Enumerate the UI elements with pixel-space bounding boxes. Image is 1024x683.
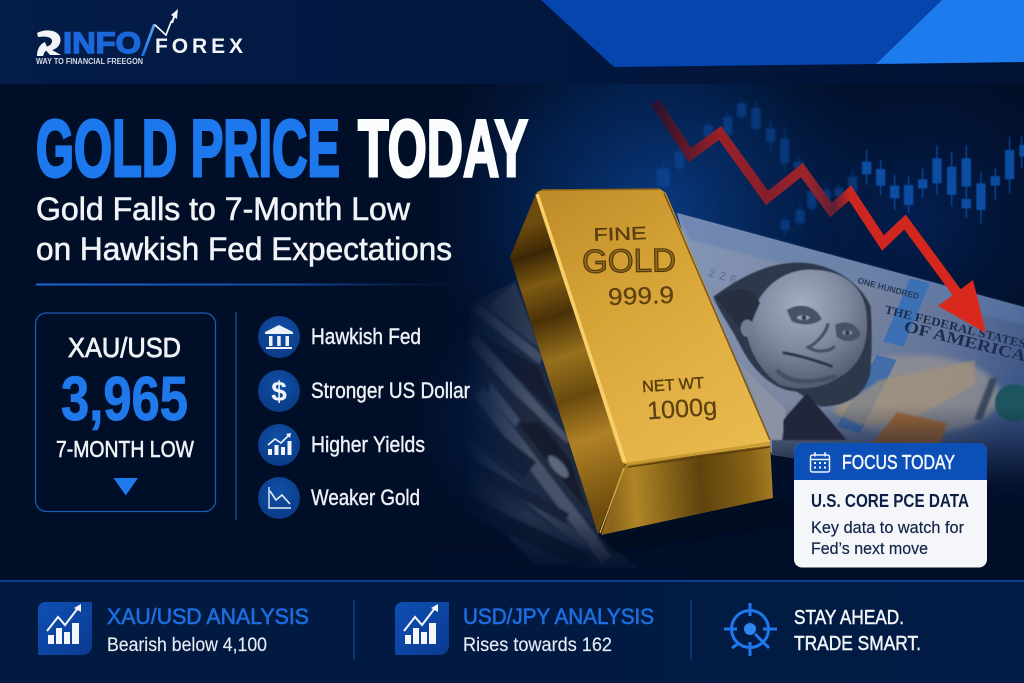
gold bar xyxy=(510,189,790,552)
price note: 7-MONTH LOW xyxy=(56,436,195,462)
bar engraving: 999.9: 999.9 xyxy=(608,282,674,311)
footer: stay ahead xyxy=(724,603,921,656)
panel: XAU/USD price xyxy=(36,313,216,512)
driver: Hawkish Fed xyxy=(258,316,421,358)
driver: Weaker Gold xyxy=(258,477,420,519)
bill lettering: THE FEDERAL STATES xyxy=(883,302,1024,351)
text: Bearish below 4,100 xyxy=(107,635,267,656)
Franklin portrait xyxy=(713,263,872,440)
bill top edge tint xyxy=(677,213,1024,325)
bill green seal xyxy=(995,384,1024,422)
driver: Higher Yields xyxy=(258,424,425,466)
brow and eye shadows xyxy=(787,306,822,325)
icon: chart box xyxy=(395,602,449,655)
callout text: Key data to watch for xyxy=(811,518,964,537)
icon: chart box xyxy=(38,602,92,655)
driver: Stronger US Dollar xyxy=(258,370,470,412)
candlestick chart xyxy=(657,98,1024,237)
bill lettering: ONE HUNDRED xyxy=(856,275,920,301)
callout text xyxy=(811,518,964,558)
logo tagline: WAY TO FINANCIAL FREEGON xyxy=(36,57,143,66)
footer: XAU/USD analysis xyxy=(38,602,309,656)
panel label: XAU/USD xyxy=(68,332,181,363)
down triangle xyxy=(114,478,138,496)
bar bottom face xyxy=(601,443,773,535)
drivers list xyxy=(258,316,470,519)
slogan: STAY AHEAD. xyxy=(794,607,904,629)
bar left face xyxy=(510,191,625,534)
bill lettering xyxy=(856,275,1024,365)
bar engraving: FINE: FINE xyxy=(593,223,647,245)
coat xyxy=(783,393,847,440)
price value: 3,965 xyxy=(61,365,188,434)
logo slash xyxy=(141,24,156,56)
callout text: Fed’s next move xyxy=(811,539,928,558)
driver: Higher Yields: Higher Yields xyxy=(311,432,425,457)
bar edge highlights xyxy=(537,189,770,533)
bar shadow xyxy=(600,500,790,552)
driver: Stronger US Dollar: $ xyxy=(271,376,287,407)
callout heading: FOCUS TODAY xyxy=(842,452,955,474)
slogan: TRADE SMART. xyxy=(794,633,921,655)
driver: Hawkish Fed: Hawkish Fed xyxy=(311,324,421,349)
bar engraving: GOLD: GOLD xyxy=(582,241,676,280)
footer: USD/JPY analysis xyxy=(395,602,654,656)
text: Rises towards 162 xyxy=(463,635,612,656)
bar engraving: 1000g: 1000g xyxy=(646,393,718,425)
title: GOLD PRICE: GOLD PRICE xyxy=(36,104,340,194)
title xyxy=(36,104,528,194)
bar front face xyxy=(537,189,770,465)
logo rising arrow xyxy=(155,9,178,35)
collar xyxy=(740,363,787,440)
icon: calendar xyxy=(810,452,830,472)
bill serial marks: 226 xyxy=(707,267,737,286)
nose xyxy=(808,323,835,351)
hair xyxy=(713,263,872,407)
subtitle line 1: Gold Falls to 7-Month Low xyxy=(36,191,411,227)
subtitle line 2: on Hawkish Fed Expectations xyxy=(36,231,452,267)
dollar bill with portrait xyxy=(677,213,1024,500)
footer bar xyxy=(0,580,1024,683)
icon: target xyxy=(724,603,777,656)
callout: focus today xyxy=(794,443,987,568)
slogan xyxy=(794,607,921,655)
red falling arrow xyxy=(655,102,986,333)
heading: USD/JPY ANALYSIS xyxy=(463,604,654,629)
bottom fade of bill xyxy=(772,405,1024,500)
callout subject: U.S. CORE PCE DATA xyxy=(811,491,969,511)
bar engraving: NET WT: NET WT xyxy=(642,375,705,396)
bill lettering: OF AMERICA xyxy=(902,318,1024,365)
dollar bills behind gold bar, left xyxy=(471,281,631,566)
driver: Stronger US Dollar: Stronger US Dollar xyxy=(311,378,470,403)
title: TODAY: TODAY xyxy=(358,104,528,194)
logo xyxy=(36,9,243,66)
callout header xyxy=(794,443,987,480)
logo wordmark FOREX: FOREX xyxy=(155,35,243,58)
header blue shapes xyxy=(541,0,1024,67)
logo wordmark INFO: INFO xyxy=(63,27,141,60)
bill feather and denomination xyxy=(832,360,998,446)
bills fade at bottom xyxy=(430,515,690,580)
ear-side hair shade xyxy=(716,289,760,338)
bill tan area xyxy=(830,355,1000,435)
bill blue security strip xyxy=(837,278,930,433)
logo icon xyxy=(37,30,61,56)
driver: Weaker Gold: Weaker Gold xyxy=(311,485,420,510)
subtitle xyxy=(36,191,452,267)
heading: XAU/USD ANALYSIS xyxy=(107,604,309,629)
head and face xyxy=(747,270,867,388)
mouth and chin xyxy=(783,353,833,367)
